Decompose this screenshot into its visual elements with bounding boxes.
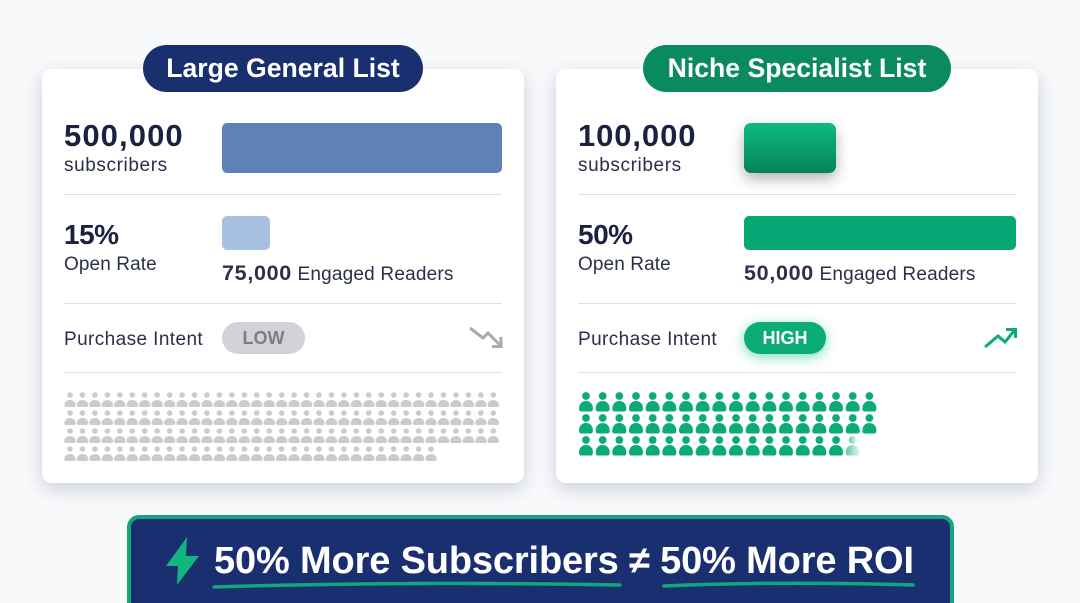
right intent badge: high: HIGH	[762, 328, 808, 348]
right purchase intent label: Purchase Intent	[578, 329, 717, 350]
left intent badge: low: LOW	[242, 328, 284, 348]
icon: lightning bolt	[166, 537, 199, 585]
left engaged readers: 75,000 Engaged Readers	[222, 261, 454, 285]
left subscribers count: 500,000	[64, 118, 184, 153]
right subscribers bar	[744, 123, 836, 173]
right open rate bar	[744, 216, 1016, 250]
right subscribers count: 100,000	[578, 118, 696, 153]
heading: large general list: Large General List	[166, 53, 400, 83]
right open rate	[578, 219, 671, 275]
panel: niche specialist list	[556, 69, 1038, 483]
heading: niche specialist list	[643, 45, 951, 92]
left intent badge: low	[222, 322, 305, 354]
underlines	[212, 582, 915, 589]
left subscribers count	[64, 118, 184, 176]
right subscribers count	[578, 118, 696, 176]
left open rate bar	[222, 216, 270, 250]
left open rate: 15%	[64, 219, 119, 250]
left purchase intent label: Purchase Intent	[64, 329, 203, 350]
right open rate: 50%	[578, 219, 633, 250]
right open rate: Open Rate	[578, 254, 671, 275]
right people grid	[579, 392, 877, 456]
heading: large general list	[143, 45, 423, 92]
left subscribers count: subscribers	[64, 155, 168, 176]
icon: trend up	[984, 328, 1017, 348]
right intent badge: high	[744, 322, 826, 354]
left open rate: Open Rate	[64, 254, 157, 275]
left open rate	[64, 219, 157, 275]
banner	[127, 515, 954, 603]
banner headline: 50% More Subscribers ≠ 50% More ROI	[214, 540, 914, 582]
left subscribers bar	[222, 123, 502, 173]
heading: niche specialist list: Niche Specialist List	[668, 53, 926, 83]
right subscribers count: subscribers	[578, 155, 682, 176]
icon: trend down	[469, 326, 502, 348]
right engaged readers: 50,000 Engaged Readers	[744, 261, 976, 285]
panel: large general list	[42, 69, 524, 483]
left people grid	[64, 392, 500, 461]
